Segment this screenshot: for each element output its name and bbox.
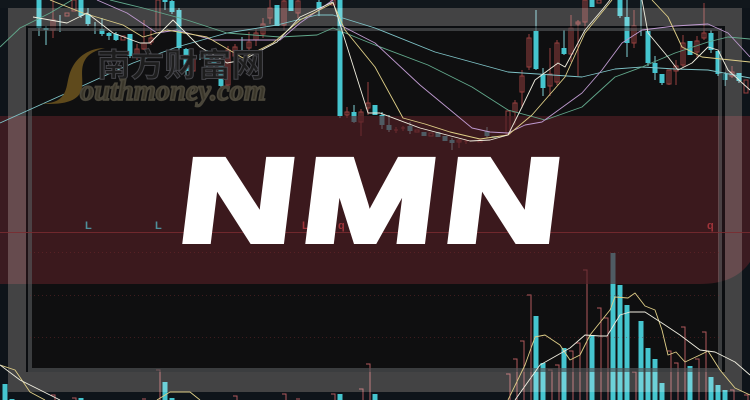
dark red band <box>0 116 750 284</box>
watermark swoosh logo <box>42 48 105 104</box>
marker L: L <box>155 220 162 232</box>
teal wicks <box>39 0 739 150</box>
line: yellow MA <box>50 0 612 139</box>
line: volume MA white <box>0 365 60 400</box>
letter N: N <box>438 135 569 267</box>
gridlines <box>0 232 750 338</box>
chart markers <box>85 220 714 232</box>
title NMN <box>173 135 569 267</box>
line: pink MA <box>97 0 333 40</box>
watermark url: outhmoney.com <box>80 74 266 107</box>
marker q red: q <box>338 220 345 232</box>
line: white MA <box>33 0 610 141</box>
letter M: M <box>296 135 445 267</box>
volume bars red <box>51 270 748 400</box>
line: volume MA yellow <box>0 365 45 400</box>
line: green MA <box>0 0 72 47</box>
volume bars teal <box>5 253 725 400</box>
watermark <box>42 40 266 107</box>
red candles <box>51 0 748 148</box>
marker L red: L <box>302 220 309 232</box>
marker L: L <box>85 220 92 232</box>
line: light blue MA <box>0 15 750 123</box>
teal bodies <box>39 0 739 143</box>
letter N: N <box>173 135 304 267</box>
marker q red: q <box>707 220 714 232</box>
watermark Chinese name: 南方财富网 <box>97 40 265 86</box>
